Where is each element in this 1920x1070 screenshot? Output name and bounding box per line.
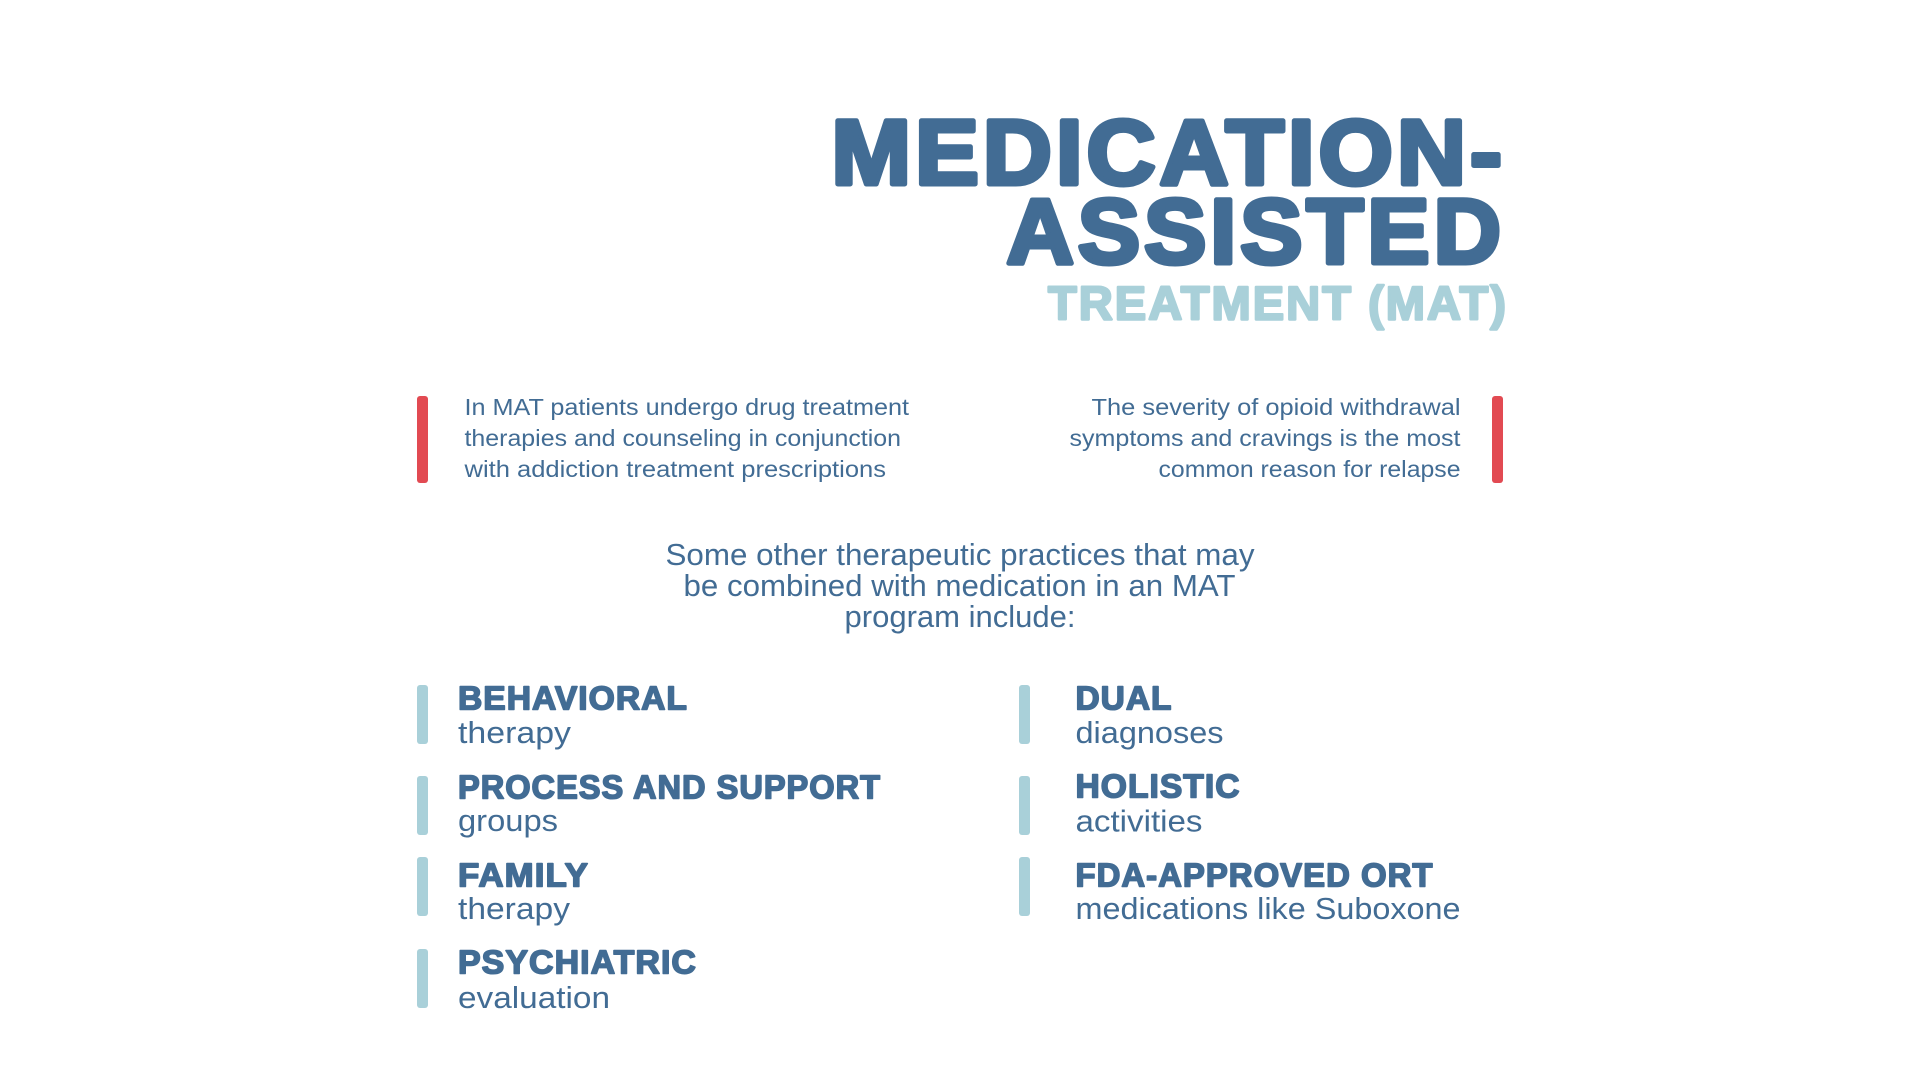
- list item: dual diagnoses: [1019, 680, 1224, 750]
- list item: behavioral therapy: [417, 680, 688, 750]
- list item: psychiatric evaluation: PSYCHIATRIC: [458, 944, 697, 980]
- list item: psychiatric evaluation: evaluation: [458, 980, 610, 1015]
- list item: holistic activities: [1019, 768, 1240, 838]
- list item: fda-approved ort medications: medications like Suboxone: [1076, 891, 1460, 926]
- list item: psychiatric evaluation: [417, 944, 697, 1015]
- list item: fda-approved ort medications: FDA-APPROVED ORT: [1076, 856, 1434, 894]
- right note text: common reason for relapse: [1158, 456, 1460, 482]
- right note text: [1070, 394, 1461, 482]
- list item: process and support groups: groups: [458, 803, 558, 838]
- left note text: [463, 394, 909, 482]
- right note text: The severity of opioid withdrawal: [1092, 394, 1460, 420]
- list item: fda-approved ort medications: [1019, 856, 1460, 926]
- panel: right note: [1070, 394, 1503, 483]
- list item: behavioral therapy: BEHAVIORAL: [458, 680, 688, 716]
- left note text: with addiction treatment prescriptions: [463, 456, 886, 482]
- list item: family therapy: FAMILY: [458, 856, 589, 894]
- left note text: In MAT patients undergo drug treatment: [464, 394, 909, 420]
- list item: behavioral therapy: therapy: [458, 715, 572, 750]
- red accent bar left: [417, 396, 428, 483]
- subtitle: TREATMENT (MAT): [1048, 276, 1508, 330]
- list item: family therapy: [417, 856, 589, 926]
- list item: family therapy: therapy: [458, 891, 571, 926]
- intro text: program include:: [844, 599, 1076, 634]
- panel: left note: [417, 394, 909, 483]
- right note text: symptoms and cravings is the most: [1070, 425, 1461, 451]
- list item: dual diagnoses: diagnoses: [1076, 715, 1224, 750]
- list item: process and support groups: PROCESS AND SUPPORT: [458, 768, 881, 806]
- intro text: [666, 537, 1255, 634]
- intro text: Some other therapeutic practices that may: [666, 537, 1255, 572]
- list item: process and support groups: [417, 768, 881, 838]
- title: ASSISTED: [1006, 181, 1505, 283]
- left note text: therapies and counseling in conjunction: [464, 425, 901, 451]
- list item: holistic activities: HOLISTIC: [1076, 768, 1240, 804]
- list item: dual diagnoses: DUAL: [1076, 680, 1172, 716]
- intro text: be combined with medication in an MAT: [684, 568, 1236, 603]
- title: MEDICATION-: [832, 102, 1506, 204]
- red accent bar right: [1492, 396, 1503, 483]
- title: [832, 102, 1508, 330]
- list item: holistic activities: activities: [1076, 804, 1202, 838]
